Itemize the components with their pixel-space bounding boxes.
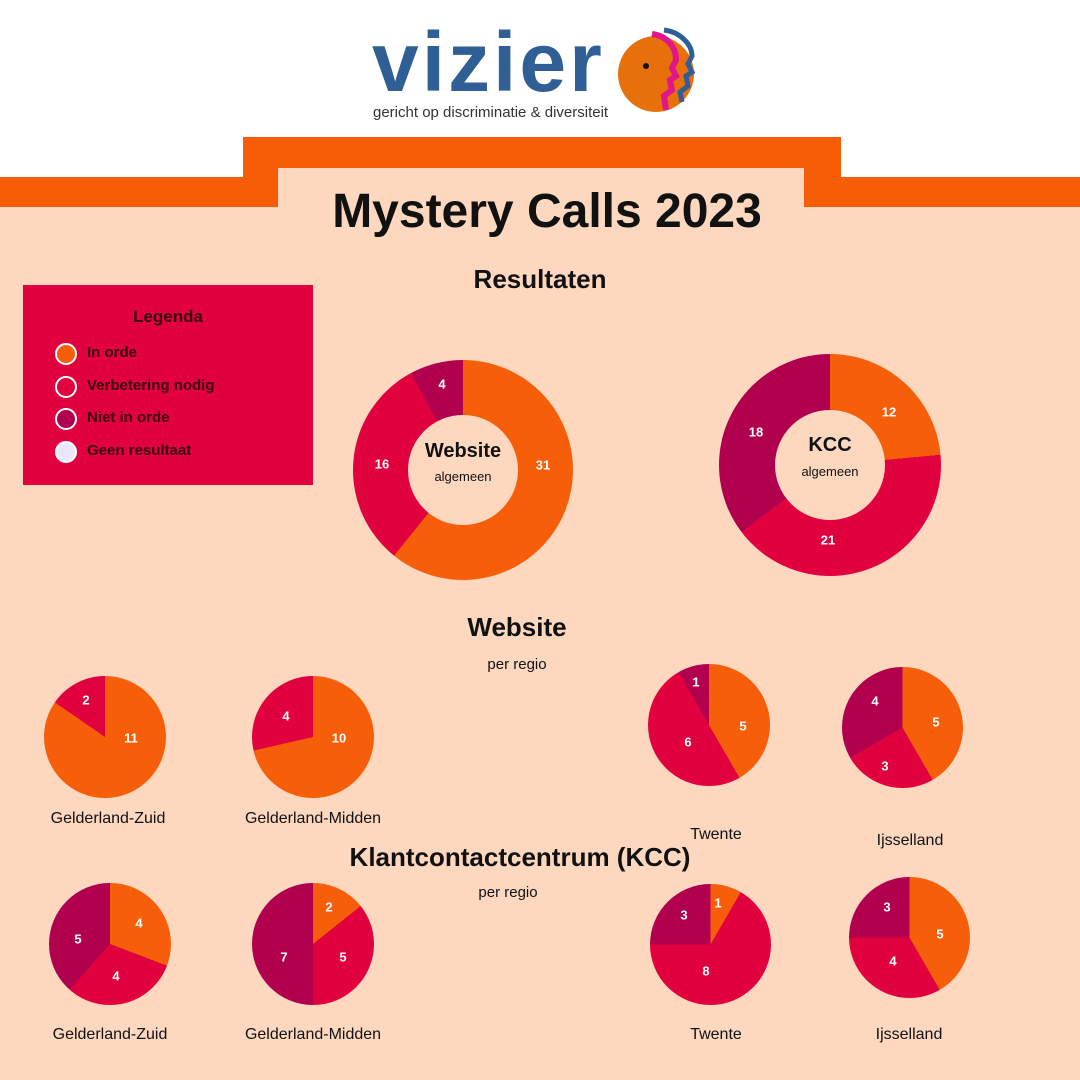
title: Mystery Calls 2023 <box>332 185 762 238</box>
donut: website algemeen: 16 <box>375 456 389 472</box>
logo: gericht op discriminatie & diversiteit <box>373 104 608 121</box>
donut: KCC algemeen <box>719 354 941 576</box>
legend: Verbetering nodig <box>87 377 215 394</box>
pie: website Gelderland-Midden: 10 <box>332 730 346 746</box>
pie: KCC Gelderland-Midden: 2 <box>325 900 333 914</box>
pie: KCC Gelderland-Zuid: 4 <box>112 968 120 984</box>
heading: resultaten: Resultaten <box>474 264 606 294</box>
pie: KCC IJsselland <box>849 877 970 998</box>
pie: KCC IJsselland: 5 <box>936 926 944 942</box>
pie: KCC Twente: 3 <box>680 908 688 922</box>
donut: KCC algemeen: KCC <box>808 434 852 456</box>
pie: KCC Twente <box>650 884 771 1005</box>
legend <box>23 285 313 485</box>
pie: KCC Gelderland-Midden: 5 <box>339 950 347 964</box>
pie: website Gelderland-Zuid: 2 <box>82 692 90 708</box>
pie: KCC IJsselland: 4 <box>889 954 897 968</box>
legend: Geen resultaat <box>87 442 191 459</box>
text: Ijsselland <box>876 1026 942 1043</box>
legend: Niet in orde <box>87 409 170 426</box>
donut: website algemeen <box>353 360 573 580</box>
donut: KCC algemeen: 21 <box>821 532 835 548</box>
heading: website per regio <box>467 612 567 673</box>
legend: Legenda <box>133 307 203 326</box>
legend: In orde <box>87 344 137 361</box>
donut: website algemeen: Website <box>425 440 501 462</box>
donut: website algemeen: 31 <box>536 458 550 472</box>
donut: KCC algemeen: 18 <box>749 424 763 440</box>
logo <box>372 15 696 121</box>
logo: vizier <box>372 15 605 109</box>
heading: KCC per regio: per regio <box>478 884 538 901</box>
pie: website Gelderland-Zuid <box>44 676 166 798</box>
donut: KCC algemeen: algemeen <box>801 464 859 479</box>
header white area <box>0 0 1080 207</box>
text: Gelderland-Zuid <box>53 1026 167 1043</box>
pie: website Gelderland-Midden <box>252 676 374 798</box>
pie: KCC Gelderland-Midden: 7 <box>280 950 288 964</box>
heading: website per regio: per regio <box>487 656 547 673</box>
pie: KCC IJsselland: 3 <box>883 900 891 914</box>
text: Gelderland-Zuid <box>51 810 165 827</box>
pie: KCC Gelderland-Midden <box>252 883 374 1005</box>
heading: website per regio: Website <box>467 612 567 642</box>
donut: website algemeen: algemeen <box>434 469 492 484</box>
pie: website IJsselland <box>842 667 963 788</box>
donut: website algemeen: 4 <box>438 376 446 392</box>
heading: KCC per regio <box>350 842 690 901</box>
pie: KCC Twente: 8 <box>702 964 710 978</box>
pie: KCC Twente: 1 <box>714 896 722 910</box>
pie: website IJsselland: 3 <box>881 758 889 774</box>
pie: website IJsselland: 5 <box>932 714 940 730</box>
text: Gelderland-Midden <box>245 810 381 827</box>
donut: KCC algemeen: 12 <box>882 404 896 420</box>
text: Gelderland-Midden <box>245 1026 381 1043</box>
pie: website Twente: 5 <box>739 718 747 734</box>
text: Ijsselland <box>877 832 943 849</box>
text: Twente <box>690 1026 742 1043</box>
pie: KCC Gelderland-Zuid: 4 <box>135 916 143 930</box>
heading: KCC per regio: Klantcontactcentrum (KCC) <box>350 842 690 872</box>
pie: website Gelderland-Zuid: 11 <box>124 730 138 746</box>
pie: website Twente <box>648 664 770 786</box>
pie: website Twente: 6 <box>684 734 692 750</box>
orange banner frame <box>0 137 1080 207</box>
pie: website Twente: 1 <box>692 674 700 690</box>
pie: KCC Gelderland-Zuid: 5 <box>74 932 82 946</box>
pie: website Gelderland-Midden: 4 <box>282 708 290 724</box>
pie: KCC Gelderland-Zuid <box>49 883 171 1005</box>
text: Twente <box>690 826 742 843</box>
pie: website IJsselland: 4 <box>871 694 879 708</box>
